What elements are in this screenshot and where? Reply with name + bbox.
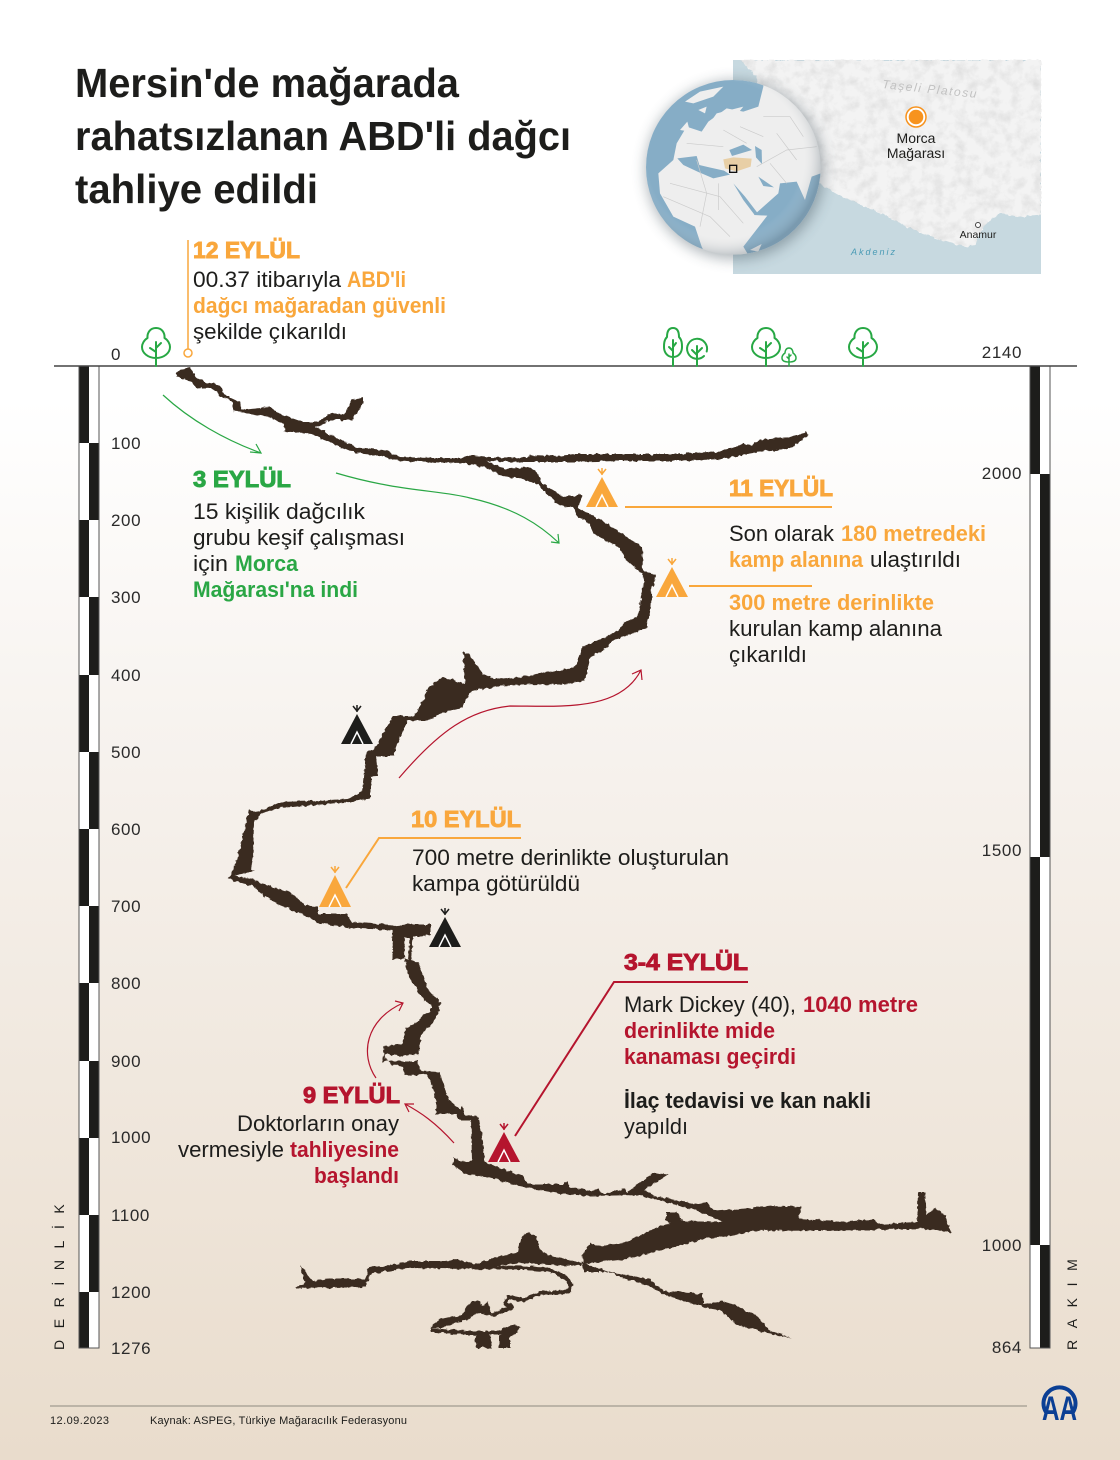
arrow: red ascent 3	[405, 1104, 454, 1143]
cave: chamber near 750 m	[392, 924, 431, 960]
tree	[142, 328, 170, 366]
text block: çıkarıldı	[729, 642, 807, 667]
text block: kurulan kamp alanına	[729, 616, 943, 641]
heading: 9 EYLÜL	[303, 1082, 400, 1108]
text block: Son olarak	[729, 521, 835, 546]
text block	[729, 521, 986, 572]
text block: şekilde çıkarıldı	[193, 319, 347, 344]
depth numbers	[111, 345, 151, 1358]
heading: 3-4 EYLÜL	[624, 949, 748, 975]
tree	[849, 328, 877, 366]
text block	[729, 590, 943, 667]
depth numbers: 700	[111, 897, 141, 916]
depth label: DERİNLİK	[50, 1193, 67, 1350]
tent: 180 m camp	[586, 468, 618, 507]
text block: 700 metre derinlikte oluşturulan	[412, 845, 729, 870]
depth numbers: 800	[111, 974, 141, 993]
map label: Morca Mağarası: Morca	[897, 130, 936, 146]
text block	[178, 1111, 399, 1188]
callout: 3-4 Eylül	[515, 949, 918, 1139]
cave: lower descent	[382, 1053, 590, 1196]
depth numbers: 1000	[111, 1128, 151, 1147]
depth numbers: 300	[111, 588, 141, 607]
arrow: red ascent 1	[399, 670, 642, 778]
text block: 180 metredeki	[841, 521, 986, 546]
text block: tahliyesine	[290, 1137, 399, 1162]
connector	[346, 838, 521, 888]
map label: Morca Mağarası	[887, 130, 945, 161]
cave: 700 m passage	[228, 875, 393, 930]
text block: 00.37 itibarıyla	[193, 267, 342, 292]
callout: 9 Eylül	[178, 1082, 400, 1188]
depth numbers: 1100	[111, 1206, 150, 1225]
arrow: red ascent 2	[367, 1001, 403, 1078]
altitude numbers: 1000	[982, 1236, 1022, 1255]
text block: ulaştırıldı	[870, 547, 961, 572]
text block: 15 kişilik dağcılık	[193, 499, 366, 524]
locator map	[733, 60, 1041, 274]
tent: black camp 750 m	[429, 908, 461, 947]
text block: grubu keşif çalışması	[193, 525, 405, 550]
text block: 1040 metre	[803, 992, 918, 1017]
depth numbers: 900	[111, 1052, 141, 1071]
map label: Taşeli Platosu: Taşeli Platosu	[882, 77, 979, 101]
text block	[193, 267, 446, 344]
title	[75, 60, 571, 212]
trees	[142, 328, 877, 366]
globe: Turkey	[723, 157, 752, 171]
cave: mid descent	[383, 958, 441, 1056]
altitude scale	[1030, 366, 1050, 1348]
text block: kampa götürüldü	[412, 871, 580, 896]
heading: 11 EYLÜL	[729, 475, 833, 501]
text block: Morca	[235, 551, 299, 576]
connector	[689, 585, 812, 587]
cave: main deep gallery	[582, 1173, 951, 1264]
text block	[412, 845, 729, 896]
text block: kanaması geçirdi	[624, 1044, 796, 1069]
tree	[782, 348, 796, 366]
callout: 12 Eylül	[184, 237, 446, 357]
arrow: green descent 2	[336, 473, 559, 543]
altitude numbers	[982, 343, 1022, 1357]
depth numbers: 400	[111, 666, 141, 685]
text block	[624, 1088, 871, 1139]
map label: Akdeniz: Akdeniz	[850, 247, 897, 257]
text block	[193, 499, 405, 602]
footer	[50, 1387, 1077, 1428]
altitude numbers: 2000	[982, 464, 1022, 483]
depth numbers: 1276	[111, 1339, 151, 1358]
tent: black camp 450 m	[341, 705, 373, 744]
callout: 10 Eylül	[346, 806, 729, 896]
cave: long horizontal passage	[461, 432, 808, 462]
cave: lower right branch	[582, 1262, 792, 1338]
text block: dağcı mağaradan güvenli	[193, 293, 446, 318]
cave: entrance passage	[175, 367, 463, 463]
map label: Morca Mağarası: Mağarası	[887, 145, 945, 161]
text block: 300 metre derinlikte	[729, 590, 934, 615]
heading: 3 EYLÜL	[193, 466, 291, 492]
text block: başlandı	[314, 1163, 399, 1188]
logo: AA	[1042, 1387, 1077, 1428]
tent: 700 m camp	[319, 866, 351, 907]
title: Mersin'de mağarada	[75, 60, 460, 106]
map marker: Anamur	[960, 222, 997, 241]
cave: winding lower passage	[430, 1267, 571, 1348]
callout: 11 Eylül	[625, 475, 986, 667]
heading: 10 EYLÜL	[411, 806, 521, 832]
text block: İlaç tedavisi ve kan nakli	[624, 1088, 871, 1113]
text block: Mağarası'na indi	[193, 577, 358, 602]
depth numbers: 200	[111, 511, 141, 530]
cave: left branch	[295, 1232, 582, 1288]
text block: derinlikte mide	[624, 1018, 775, 1043]
tree	[752, 328, 780, 366]
altitude label: RAKIM	[1064, 1248, 1080, 1350]
callout: 3 Eylül	[193, 466, 405, 602]
text block: ABD'li	[347, 267, 406, 292]
depth numbers: 600	[111, 820, 141, 839]
title: tahliye edildi	[75, 166, 318, 212]
altitude numbers: 2140	[982, 343, 1022, 362]
map marker: Anamur: Anamur	[960, 229, 997, 241]
depth numbers: 500	[111, 743, 141, 762]
connector	[184, 240, 192, 357]
cave map	[175, 367, 951, 1348]
arrow: green descent 1	[163, 395, 261, 453]
text block: kamp alanına	[729, 547, 864, 572]
tree	[687, 339, 707, 366]
title: rahatsızlanan ABD'li dağcı	[75, 113, 571, 159]
tree	[664, 328, 682, 366]
map marker: Morca Mağarası	[906, 107, 926, 127]
depth numbers: 0	[111, 345, 121, 364]
text block: için	[193, 551, 228, 576]
altitude numbers: 864	[992, 1338, 1022, 1357]
depth numbers: 100	[111, 434, 141, 453]
text block: vermesiyle	[178, 1137, 284, 1162]
text block	[624, 992, 918, 1069]
source: Kaynak: ASPEG, Türkiye Mağaracılık Federasyonu	[150, 1415, 407, 1427]
text block: Doktorların onay	[237, 1111, 399, 1136]
tent: 300 m camp	[656, 558, 688, 597]
cave: descending passage	[228, 458, 655, 878]
date: 12.09.2023	[50, 1415, 109, 1427]
heading: 12 EYLÜL	[193, 237, 300, 263]
altitude numbers: 1500	[982, 841, 1022, 860]
depth scale	[79, 366, 99, 1348]
logo: AA: AA	[1042, 1390, 1077, 1428]
globe: location box	[730, 165, 737, 172]
depth numbers: 1200	[111, 1283, 151, 1302]
tent: 1040 m camp	[488, 1123, 520, 1162]
globe	[638, 73, 832, 267]
connector	[515, 982, 748, 1136]
connector	[625, 506, 832, 508]
ground line	[54, 365, 1077, 367]
text block: Mark Dickey (40),	[624, 992, 796, 1017]
text block: yapıldı	[624, 1114, 688, 1139]
